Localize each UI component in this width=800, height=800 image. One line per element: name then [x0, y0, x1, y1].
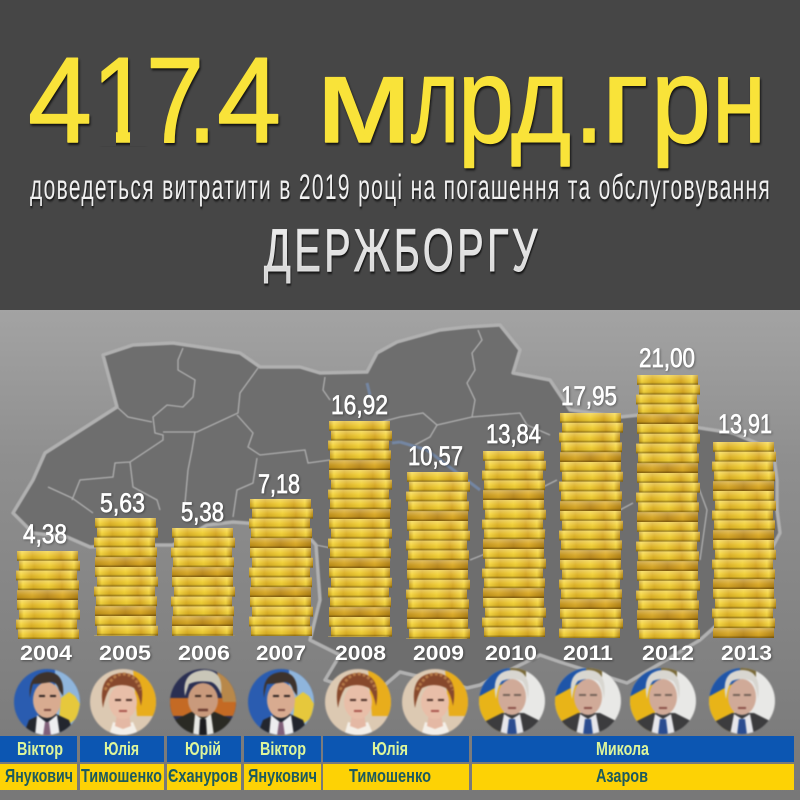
- title: 417.4 млрд.грн: [28, 32, 766, 168]
- plate: Віктор Янукович second term: Віктор: [260, 739, 306, 759]
- title: 417.4 млрд.грн: р: [651, 32, 711, 168]
- column 2007: [247, 499, 317, 636]
- map of Ukraine: [13, 325, 780, 696]
- year labels: 2011: [563, 642, 613, 665]
- column 2009: [404, 472, 474, 639]
- portrait: Тимошенко 2009: [401, 668, 469, 736]
- year labels: 2005: [99, 642, 151, 665]
- title: 417.4 млрд.грн: л: [411, 32, 459, 168]
- column 2013: [710, 442, 780, 638]
- plate: Юрій Єхануров: Єхануров: [168, 766, 238, 786]
- portrait: Янукович 2004: [13, 668, 81, 736]
- plate: Юрій Єхануров: Юрій: [185, 739, 221, 759]
- year labels: 2009: [413, 642, 464, 665]
- title: 417.4 млрд.грн: 4: [28, 32, 92, 168]
- title: 417.4 млрд.грн: 7: [146, 32, 204, 168]
- plate: Віктор Янукович second term: [244, 736, 321, 790]
- value labels: 5,38: [181, 497, 224, 527]
- year labels: 2012: [642, 642, 694, 665]
- heading: ДЕРЖБОРГУ: ДЕРЖБОРГУ: [264, 217, 538, 284]
- portrait: Азаров 2013: [708, 667, 776, 735]
- year labels: 2013: [721, 642, 772, 665]
- plate: Юлія Тимошенко second term: [323, 736, 469, 790]
- portrait: Єхануров 2006: [169, 668, 237, 736]
- column 2004: [14, 551, 84, 639]
- plate: Микола Азаров: [472, 736, 794, 790]
- plate: Юлія Тимошенко second term: Юлія: [372, 739, 408, 759]
- plate: Віктор Янукович: [0, 736, 77, 790]
- title: 417.4 млрд.грн: н: [712, 32, 766, 168]
- title: 417.4 млрд.грн: .: [187, 32, 217, 168]
- column 2010: [480, 451, 550, 637]
- plate: Юлія Тимошенко: [80, 736, 164, 790]
- column 2006: [169, 528, 239, 636]
- plate: Віктор Янукович: Янукович: [5, 766, 73, 786]
- column 2005: [92, 518, 162, 636]
- coin bar chart: [14, 343, 780, 665]
- column 2008: [326, 421, 396, 637]
- title: 417.4 млрд.грн: 4: [217, 32, 281, 168]
- title: 417.4 млрд.грн: м: [316, 32, 412, 168]
- title: 417.4 млрд.грн: .: [574, 32, 604, 168]
- plate: Віктор Янукович: Віктор: [17, 739, 63, 759]
- portrait: Азаров 2011: [554, 667, 622, 735]
- subtitle: доведеться витратити в 2019 році на погашення та обслуговування: [30, 169, 770, 207]
- title: 417.4 млрд.грн: д: [511, 32, 571, 168]
- value labels: 10,57: [408, 441, 463, 471]
- background: lower grey panel: [0, 310, 800, 800]
- title: 417.4 млрд.грн: р: [458, 32, 514, 168]
- value labels: 13,84: [486, 419, 541, 449]
- value labels: 17,95: [561, 381, 617, 411]
- header panel: [0, 0, 800, 310]
- title: 417.4 млрд.грн: г: [601, 32, 649, 168]
- year labels: 2006: [178, 642, 230, 665]
- portrait: Тимошенко 2008: [324, 668, 392, 736]
- portrait: Тимошенко 2005: [89, 668, 157, 736]
- value labels: 7,18: [258, 469, 300, 499]
- portrait: Янукович 2007: [247, 668, 315, 736]
- portrait: Азаров 2012: [629, 667, 697, 735]
- plate: Віктор Янукович second term: Янукович: [248, 766, 317, 786]
- portrait: Азаров 2010: [478, 667, 546, 735]
- column 2011: [557, 413, 627, 638]
- value labels: 5,63: [100, 488, 145, 518]
- year labels: [20, 642, 772, 665]
- value labels: 4,38: [23, 519, 67, 549]
- title: 417.4 млрд.грн: 1: [92, 32, 150, 168]
- year labels: 2010: [485, 642, 537, 665]
- plate: Юрій Єхануров: [167, 736, 241, 790]
- plate: Микола Азаров: Микола: [596, 739, 650, 759]
- plate: Юлія Тимошенко second term: Тимошенко: [349, 766, 431, 786]
- column 2012: [634, 375, 704, 639]
- year labels: 2004: [20, 642, 72, 665]
- plate: Юлія Тимошенко: Тимошенко: [81, 766, 162, 786]
- value labels: 21,00: [639, 343, 695, 373]
- value labels: 13,91: [718, 409, 772, 439]
- plate: Микола Азаров: Азаров: [596, 766, 648, 786]
- value labels: [23, 343, 772, 549]
- name plates: [0, 736, 794, 790]
- year labels: 2008: [335, 642, 386, 665]
- portraits row: [13, 667, 776, 736]
- year labels: 2007: [256, 642, 306, 665]
- plate: Юлія Тимошенко: Юлія: [104, 739, 139, 759]
- value labels: 16,92: [331, 390, 388, 420]
